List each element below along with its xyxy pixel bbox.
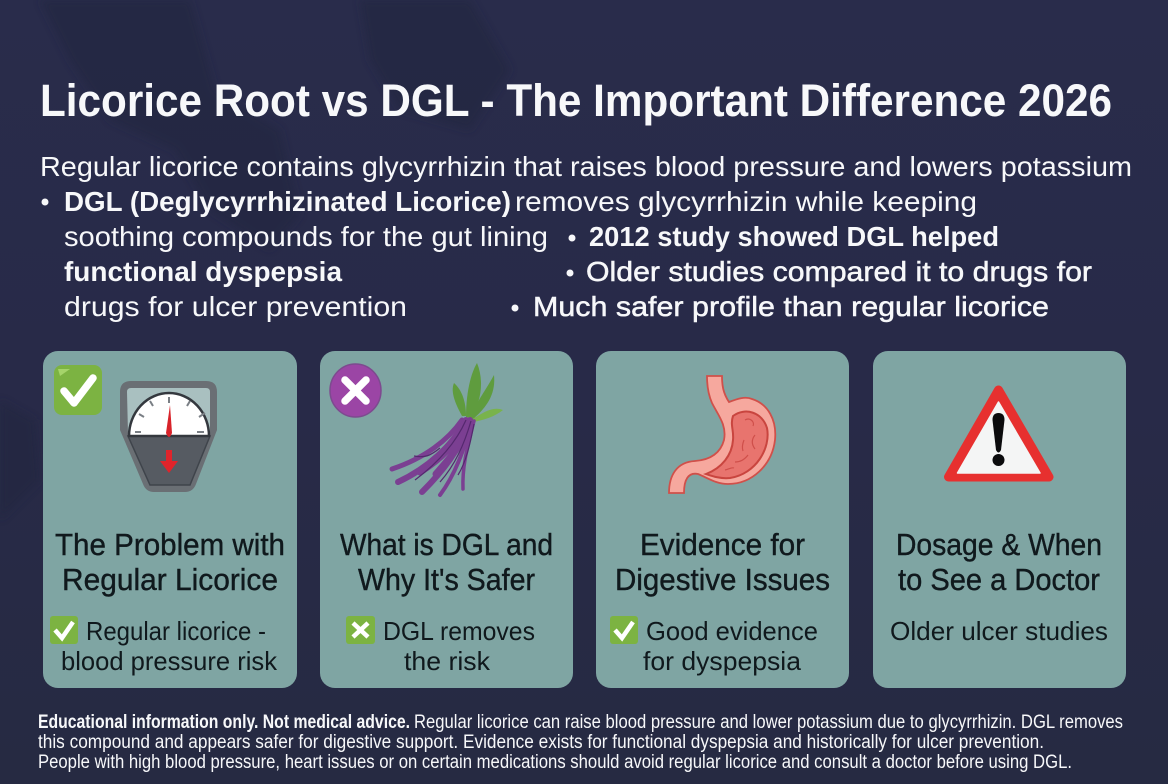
intro text block: removes glycyrrhizin while keeping — [515, 186, 977, 217]
card body text: Good evidence — [646, 616, 818, 646]
intro text block: 2012 study showed DGL helped — [589, 221, 999, 252]
card body text: blood pressure risk — [61, 646, 278, 676]
card body text: Regular licorice - — [86, 616, 266, 646]
icon: blood pressure gauge — [120, 381, 217, 492]
footer disclaimer: Educational information only. Not medical advice. — [38, 712, 410, 733]
icon: green check badge — [54, 365, 102, 415]
card heading — [55, 527, 285, 597]
card body text: the risk — [404, 646, 491, 676]
card heading: to See a Doctor — [898, 562, 1100, 597]
intro text block: Older studies compared it to drugs for — [586, 256, 1092, 287]
intro text block — [40, 151, 1132, 322]
intro text block: soothing compounds for the gut lining — [64, 221, 548, 252]
icon: warning triangle — [948, 390, 1049, 477]
card heading: Regular Licorice — [62, 562, 278, 597]
icon: stomach — [669, 376, 775, 493]
card body text — [610, 616, 818, 676]
card heading: The Problem with — [55, 527, 285, 562]
card heading: Dosage & When — [896, 527, 1102, 562]
title: Licorice Root vs DGL - The Important Difference 2026 — [40, 75, 1112, 126]
card body text — [346, 616, 535, 676]
footer disclaimer — [38, 712, 1123, 773]
card heading: What is DGL and — [340, 527, 553, 562]
panel: evidence for digestive issues — [596, 351, 849, 688]
icon: purple x badge — [330, 364, 381, 417]
intro text block: Regular licorice contains glycyrrhizin that raises blood pressure and lowers potassium — [40, 151, 1132, 182]
card heading: Why It's Safer — [358, 562, 535, 597]
card body text: for dyspepsia — [643, 646, 802, 676]
intro text block: DGL (Deglycyrrhizinated Licorice) — [64, 186, 511, 217]
card heading — [615, 527, 830, 597]
card heading: Evidence for — [640, 527, 805, 562]
card body text — [50, 616, 278, 676]
panel: dosage and when to see a doctor — [873, 351, 1126, 688]
card body text: Older ulcer studies — [890, 616, 1108, 646]
panel: the problem with regular licorice — [43, 351, 297, 688]
card body text: DGL removes — [383, 616, 535, 646]
card heading — [340, 527, 553, 597]
card heading: Digestive Issues — [615, 562, 830, 597]
card heading — [896, 527, 1102, 597]
intro text block: drugs for ulcer prevention — [64, 291, 407, 322]
footer disclaimer: this compound and appears safer for digestive support. Evidence exists for functional dyspepsia and historically for ulcer prevention. — [38, 732, 1044, 753]
intro text block: functional dyspepsia — [64, 256, 342, 287]
intro text block: Much safer profile than regular licorice — [533, 291, 1049, 322]
icon: licorice root — [392, 363, 503, 495]
panel: what is DGL — [320, 351, 573, 688]
